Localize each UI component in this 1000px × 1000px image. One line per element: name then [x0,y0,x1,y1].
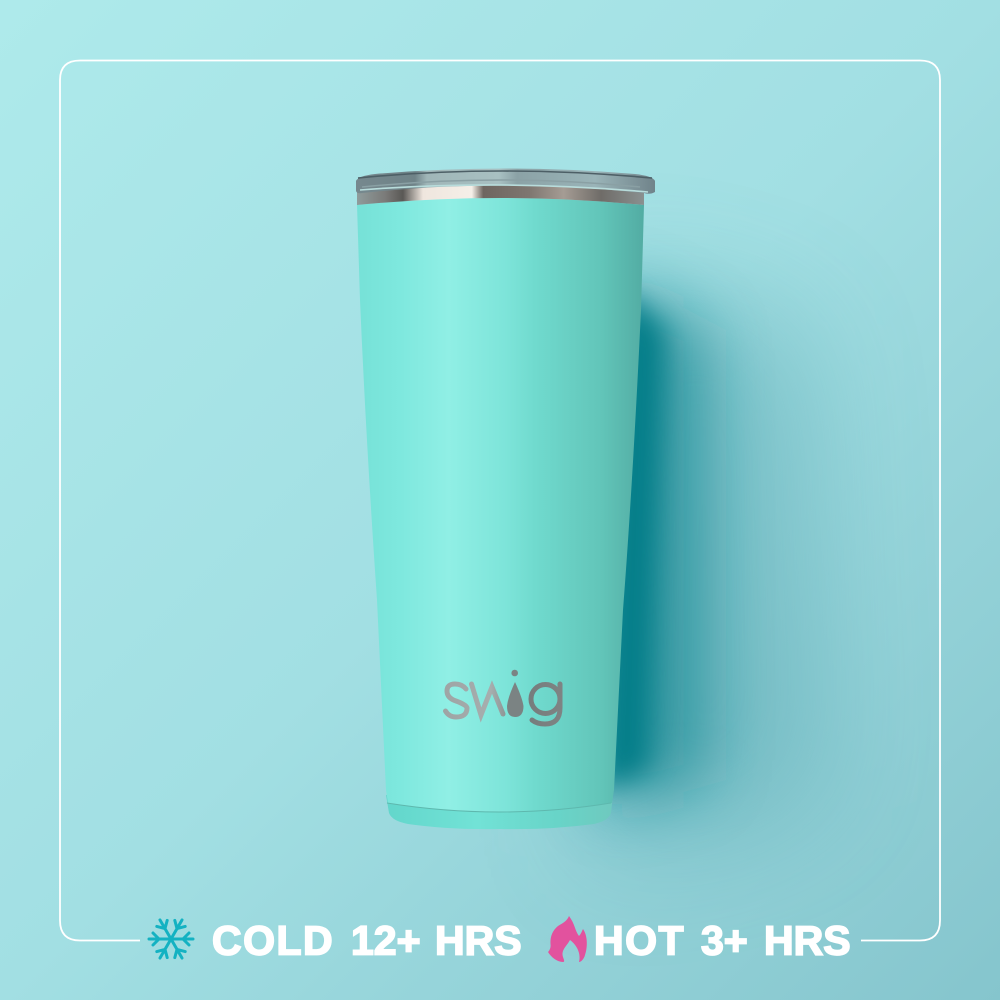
hot label [548,916,851,964]
logo letter s [446,684,467,717]
cold text: HRS [435,918,522,964]
logo letter g [531,684,560,724]
cold label [149,917,522,964]
tumbler [356,168,655,829]
logo dot [511,670,518,676]
icon: flame [548,916,587,962]
tumbler base [386,795,613,829]
hot text: HRS [764,918,851,964]
clear lid [356,168,655,194]
cold text: COLD [212,918,334,964]
steel ring [357,186,644,205]
cold text: 12+ [351,918,421,964]
hot text: HOT [594,918,685,964]
logo drop [507,682,524,717]
icon: snowflake [149,917,193,961]
swig logo [446,670,560,724]
hot text: 3+ [701,918,748,964]
tumbler shadow [600,280,820,860]
tumbler body [357,198,644,812]
logo letter w [472,684,503,715]
base seam [387,803,611,812]
white rounded frame [60,60,940,940]
